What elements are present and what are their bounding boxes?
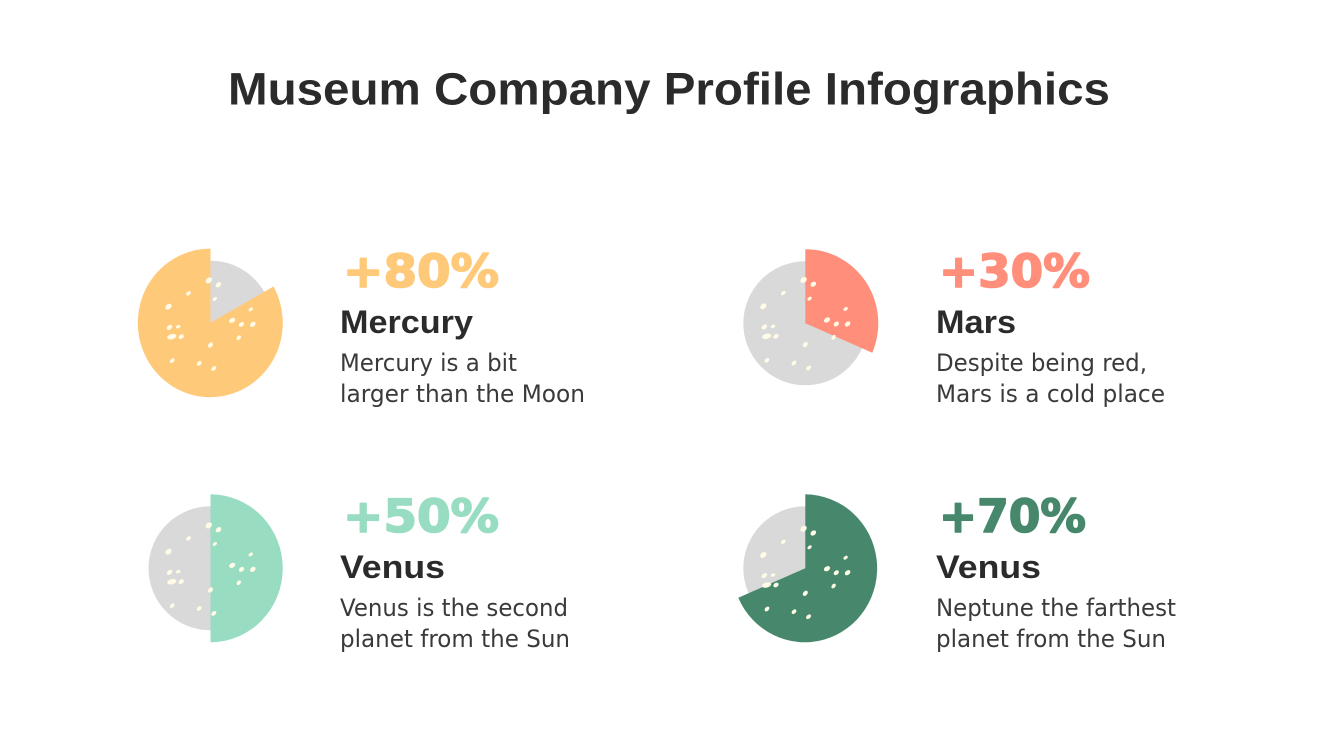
title: Museum Company Profile Infographics xyxy=(228,64,1110,114)
stat: +80%: +80% xyxy=(343,245,499,298)
stat: +30%: +30% xyxy=(939,245,1090,298)
chart: Neptune pie 70% xyxy=(738,494,877,642)
panel: Venus xyxy=(148,490,570,653)
heading: Venus: Venus xyxy=(340,549,445,585)
chart: Mars pie 30% xyxy=(743,249,878,385)
text: Mercury description: larger than the Moon xyxy=(340,380,585,408)
heading: Mercury: Mercury xyxy=(340,304,473,340)
stat: +70%: +70% xyxy=(939,490,1086,543)
text: Neptune description: Neptune the farthest xyxy=(936,594,1176,622)
panel: Neptune xyxy=(738,490,1176,653)
text: Mercury description: Mercury is a bit xyxy=(340,349,517,377)
stat: +50%: +50% xyxy=(343,490,499,543)
panel: Mercury xyxy=(138,245,585,408)
chart: Mercury pie 80% xyxy=(138,249,283,397)
chart: Venus pie 50% xyxy=(148,494,283,642)
panel: Mars xyxy=(743,245,1165,408)
text: Mars description: Mars is a cold place xyxy=(936,380,1165,408)
text: Venus description: Venus is the second xyxy=(340,594,568,622)
heading: Venus: Venus xyxy=(936,549,1041,585)
text: Venus description: planet from the Sun xyxy=(340,625,570,653)
heading: Mars: Mars xyxy=(936,304,1016,340)
text: Neptune description: planet from the Sun xyxy=(936,625,1166,653)
text: Mars description: Despite being red, xyxy=(936,349,1147,377)
